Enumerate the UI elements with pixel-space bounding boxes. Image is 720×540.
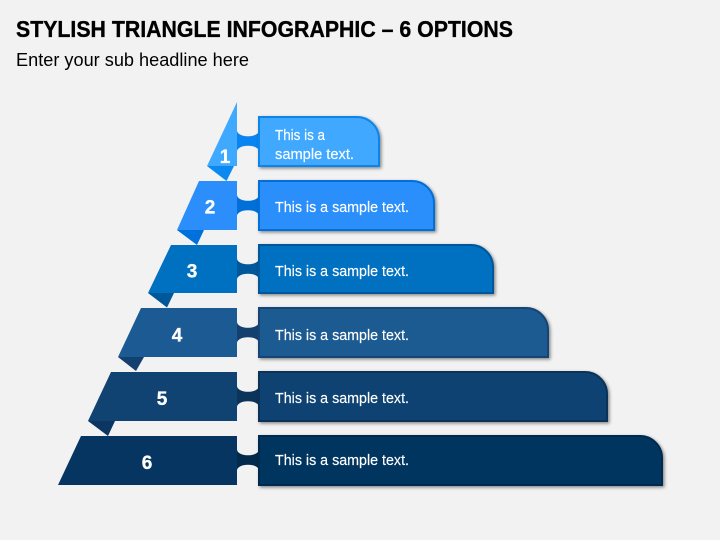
fold 2 (177, 230, 204, 245)
connector 1 (237, 130, 259, 152)
level 5 (88, 372, 607, 436)
triangle segment 5 (88, 372, 237, 421)
subtitle: Enter your sub headline here (16, 50, 249, 70)
connector 2 (237, 195, 259, 216)
label box 4 (259, 308, 548, 357)
title: STYLISH TRIANGLE INFOGRAPHIC – 6 OPTIONS (16, 16, 513, 42)
triangle segment 6 (58, 436, 237, 485)
triangle segment 1 (207, 102, 237, 166)
connector 5 (237, 386, 259, 407)
number 3: 3 (187, 262, 197, 282)
triangle segment 3 (148, 245, 237, 293)
number 1: 1 (220, 147, 231, 168)
label text 1: sample text. (275, 146, 354, 163)
label box 5 (259, 372, 607, 421)
number 4: 4 (172, 326, 183, 346)
label text 1: This is a (275, 127, 326, 144)
fold 1 (207, 166, 234, 181)
fold 4 (118, 357, 144, 371)
level 4 (118, 308, 548, 371)
number 6: 6 (142, 453, 152, 474)
fold 3 (148, 293, 174, 308)
fold 5 (88, 421, 115, 436)
connector 4 (237, 322, 259, 343)
connector 6 (237, 450, 259, 470)
connector 3 (237, 258, 259, 280)
triangle segment 4 (118, 308, 237, 357)
level 6 (58, 436, 662, 485)
level 2 (177, 181, 434, 245)
label box 3 (259, 245, 493, 293)
label text 3: This is a sample text. (275, 263, 409, 280)
label text 6: This is a sample text. (275, 452, 409, 469)
level 1 (207, 102, 379, 181)
label box 1 (259, 117, 379, 166)
label text 5: This is a sample text. (275, 390, 409, 407)
number 5: 5 (157, 389, 168, 410)
triangle segment 2 (177, 181, 237, 230)
level 3 (148, 245, 493, 308)
label text 4: This is a sample text. (275, 327, 409, 344)
label box 6 (259, 436, 662, 485)
label box 2 (259, 181, 434, 230)
label text 2: This is a sample text. (275, 199, 409, 216)
number 2: 2 (205, 198, 215, 218)
